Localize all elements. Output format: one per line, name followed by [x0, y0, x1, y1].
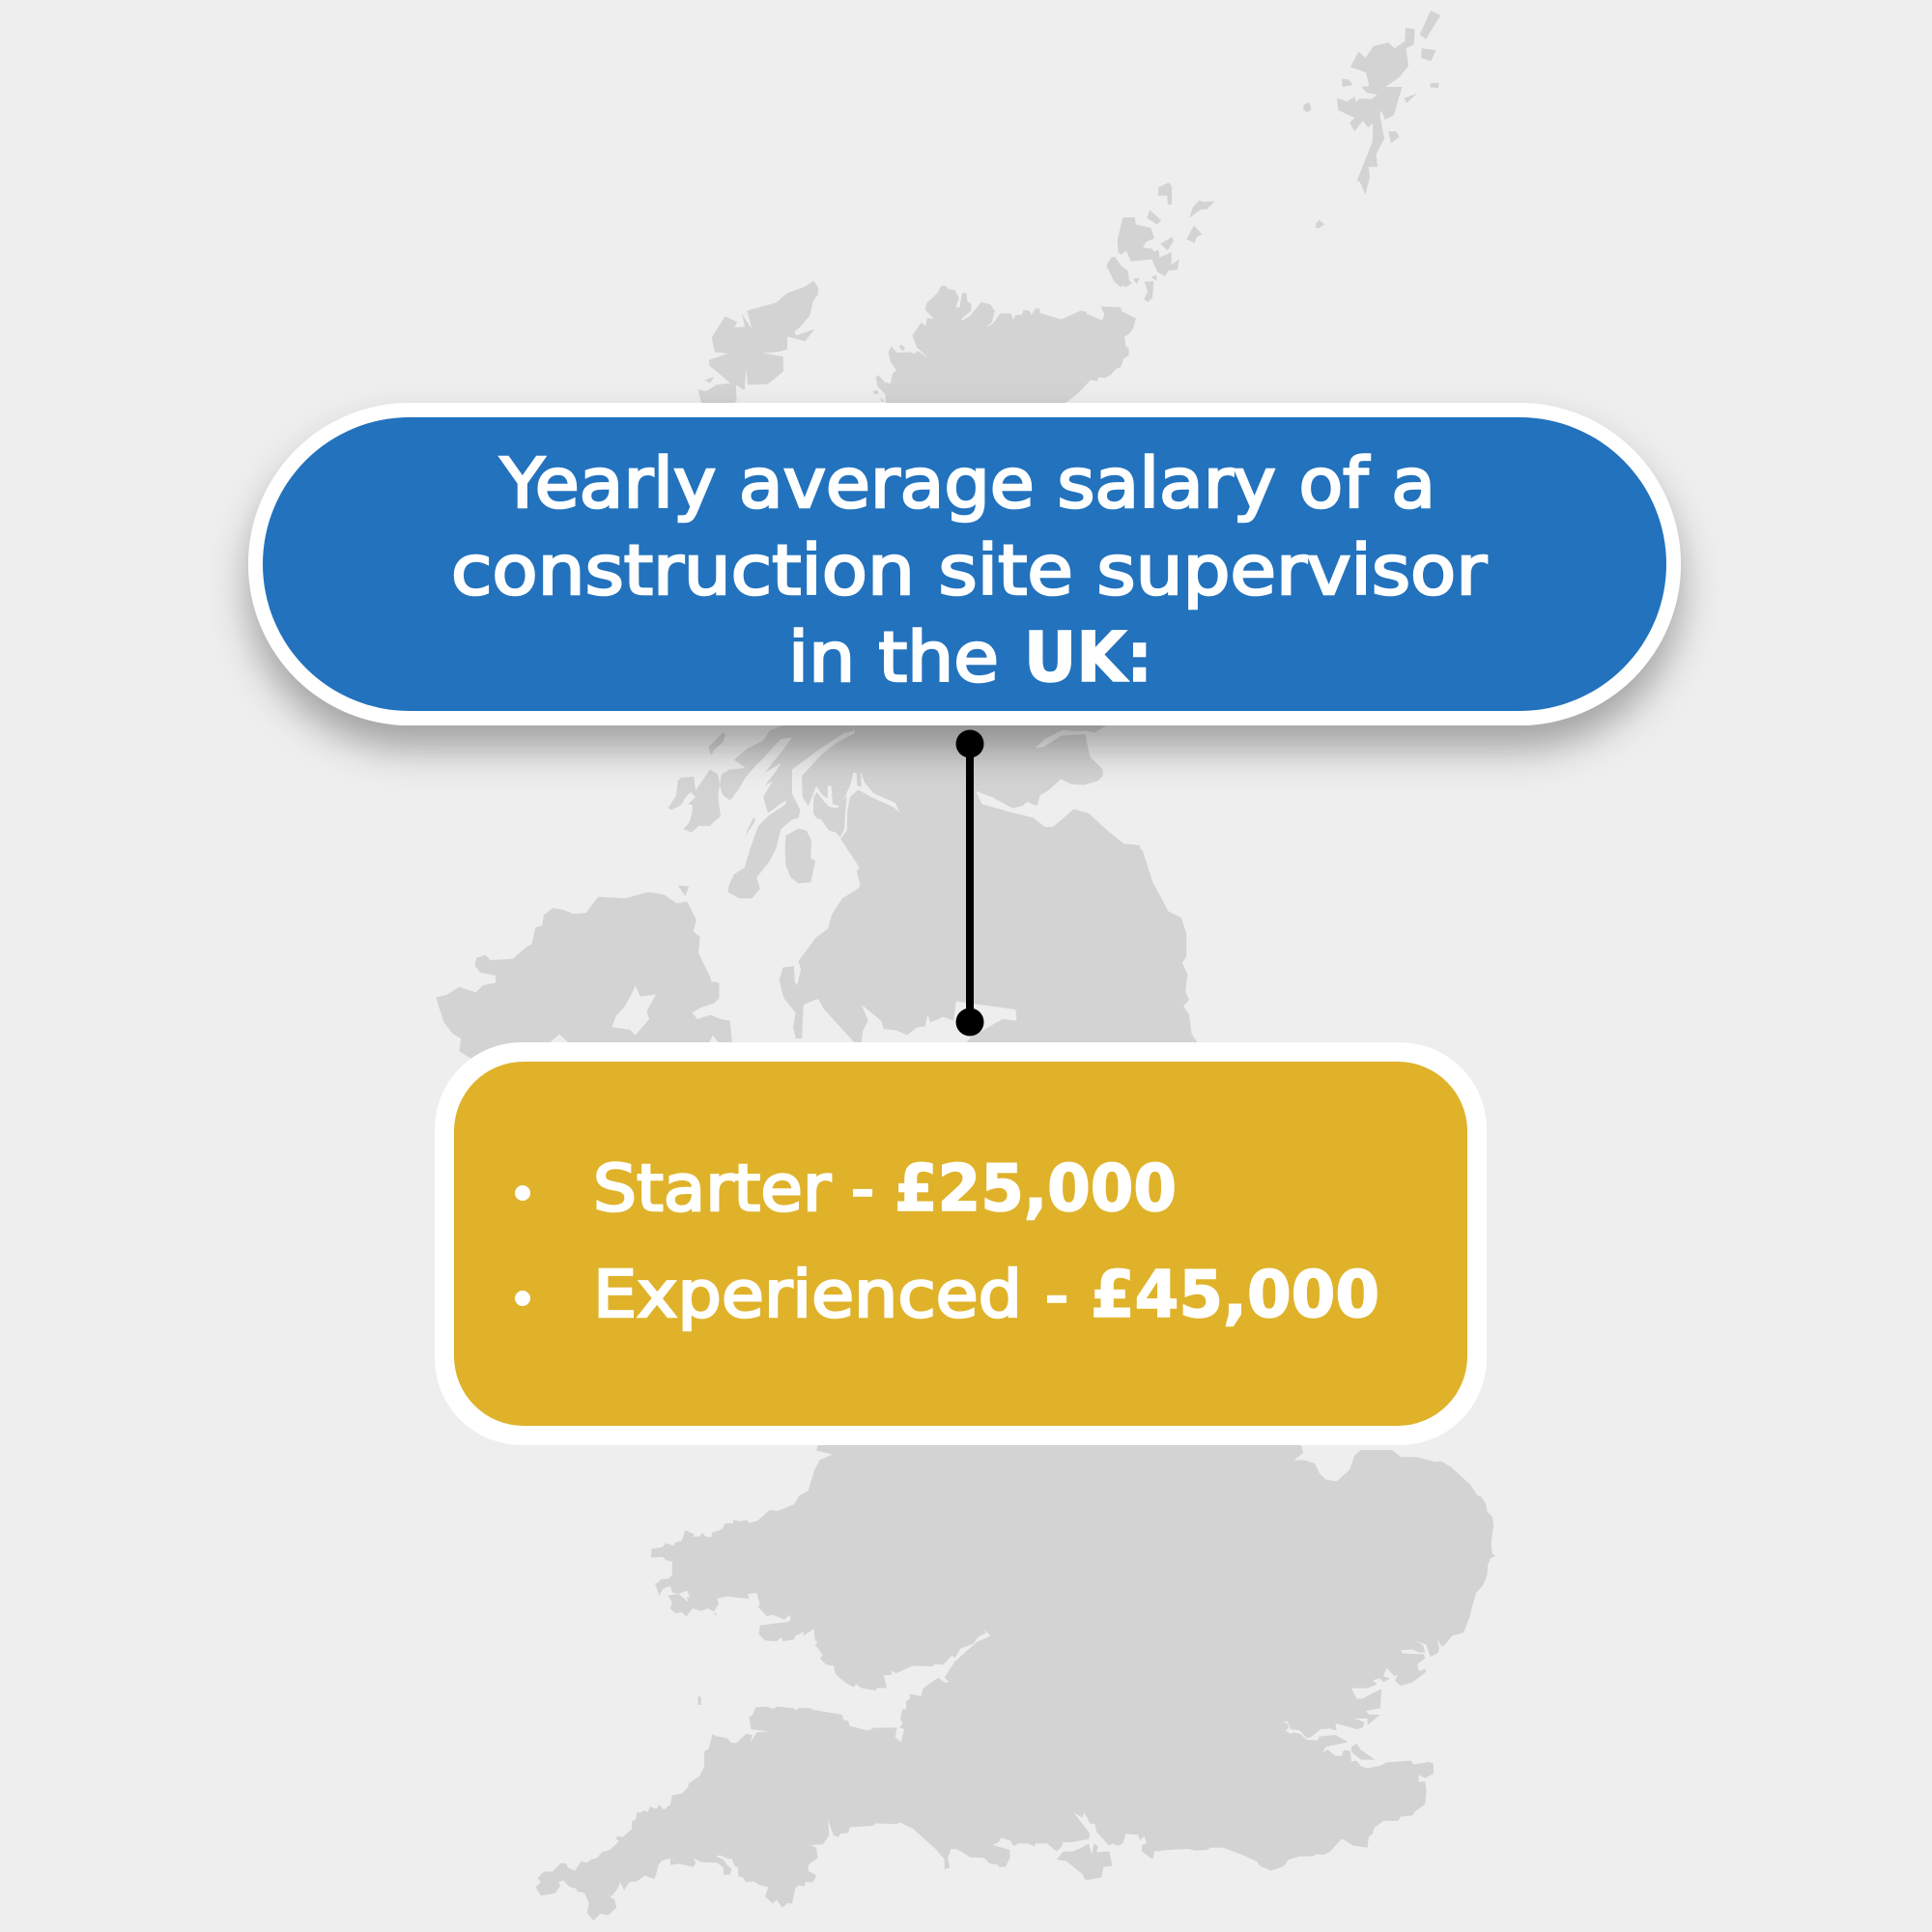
title text: UK:	[1024, 617, 1152, 697]
bullet: experienced	[515, 1291, 530, 1306]
bullet: starter	[515, 1185, 530, 1201]
panel: blue title pill	[248, 403, 1681, 725]
salary: starter: -	[851, 1151, 874, 1226]
salary: experienced	[593, 1257, 1379, 1332]
salary: starter: Starter	[593, 1151, 831, 1226]
salary: starter	[593, 1151, 1177, 1226]
panel: yellow salary box	[435, 1042, 1487, 1445]
map: southern Scotland and the Clyde islands	[668, 725, 1140, 913]
map: northern Scotland, Orkney and Shetland	[872, 11, 1440, 425]
map: northern England and Northern Ireland	[436, 845, 1198, 1069]
title text: Yearly average salary of a	[499, 443, 1435, 524]
salary: experienced: -	[1045, 1257, 1068, 1332]
title text: construction site supervisor	[451, 530, 1488, 611]
salary: experienced: Experienced	[593, 1257, 1022, 1332]
map of the UK silhouette	[436, 11, 1495, 1920]
map: Outer Hebrides	[698, 281, 818, 412]
salary: starter: £25,000	[895, 1151, 1177, 1226]
connector line with end dots	[956, 730, 983, 1036]
map: Wales and southern England	[536, 1442, 1495, 1920]
salary: experienced: £45,000	[1091, 1257, 1379, 1332]
title text: in the	[788, 617, 999, 697]
title text	[451, 443, 1488, 697]
